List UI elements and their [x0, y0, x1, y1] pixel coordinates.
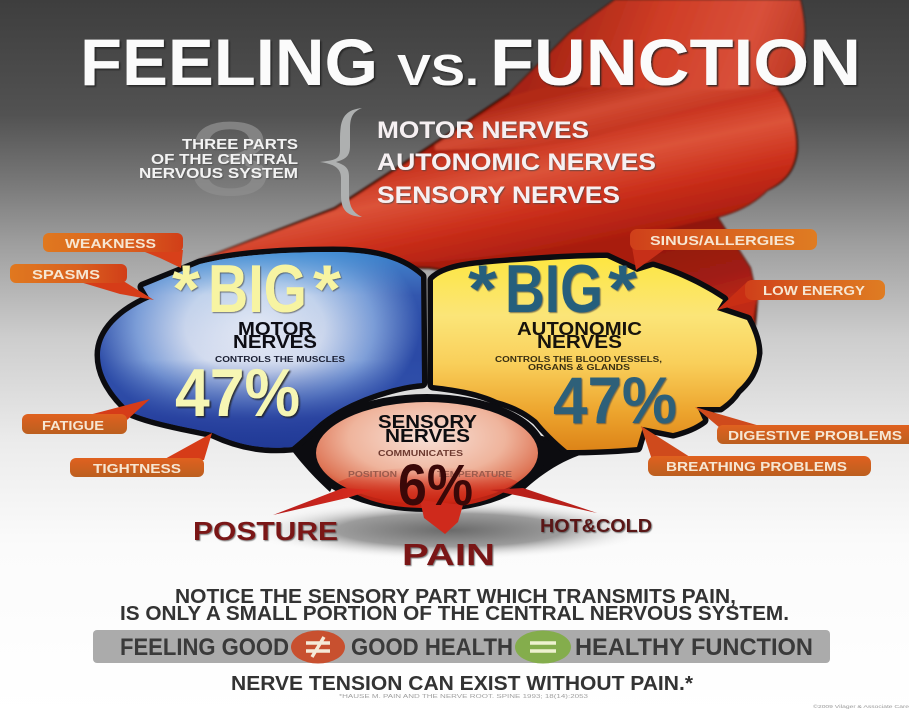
black flare: right: [515, 430, 600, 492]
callout: fatigue: [22, 399, 150, 434]
icon: not equal sign: [291, 630, 345, 664]
red glow at base of oval: [338, 467, 518, 508]
intro: three parts label: OF THE CENTRAL: [151, 151, 298, 168]
title: FUNCTION: [490, 25, 861, 99]
panel shape: blue lobe: [100, 252, 422, 448]
icon: faint numeral 3: 3: [188, 101, 273, 218]
callout: breathing problems: BREATHING PROBLEMS: [666, 459, 847, 474]
icon: curly brace: [320, 108, 362, 217]
callout: low energy: [717, 280, 885, 310]
panel shape: pink oval: [312, 398, 542, 508]
heading: [378, 412, 477, 446]
copyright: ©2009 Vilager & Associate Care: [813, 703, 909, 709]
position and temperature labels: TEMPERATURE: [437, 470, 513, 479]
heading: MOTOR: [238, 319, 313, 339]
list of three nerve types: AUTONOMIC NERVES: [377, 149, 656, 176]
heading: [233, 319, 317, 352]
icon: equals sign: [515, 630, 571, 664]
equation bar: GOOD HEALTH: [351, 634, 513, 661]
panel: sensory nerves: [273, 398, 597, 534]
text block: notice: NOTICE THE SENSORY PART WHICH TRANSMITS PAIN,: [175, 586, 736, 608]
label: posture: POSTURE: [193, 516, 338, 546]
callout: low energy: LOW ENERGY: [763, 283, 865, 298]
heading: NERVES: [537, 332, 622, 352]
description: ORGANS & GLANDS: [528, 363, 631, 372]
heading: NERVES: [385, 426, 470, 446]
equation bar: [93, 630, 830, 664]
equation bar: FEELING GOOD: [120, 634, 289, 661]
list of three nerve types: MOTOR NERVES: [377, 117, 589, 144]
black flare: left: [285, 425, 350, 492]
intro: three parts label: [139, 101, 298, 218]
intro: three parts label: NERVOUS SYSTEM: [139, 165, 298, 182]
callout: fatigue: FATIGUE: [42, 418, 104, 433]
big label: *: [608, 251, 638, 327]
list of three nerve types: SENSORY NERVES: [377, 182, 620, 209]
heading: NERVES: [233, 332, 317, 352]
heading: AUTONOMIC: [517, 319, 642, 339]
description: COMMUNICATES: [378, 449, 464, 458]
callout: weakness: WEAKNESS: [65, 236, 156, 251]
big label: *: [172, 251, 201, 327]
big label: BIG: [208, 251, 307, 327]
description: CONTROLS THE MUSCLES: [215, 355, 346, 364]
panel shape: yellow lobe: [433, 258, 757, 450]
illustration: red spine segments: [195, 0, 804, 325]
percentage: 47%: [175, 355, 300, 431]
title: FEELING: [80, 25, 378, 99]
chart shadow under sensory section: [245, 500, 655, 560]
callout: sinus and allergies: SINUS/ALLERGIES: [650, 233, 795, 248]
big label: *: [468, 251, 498, 327]
label: pain: PAIN: [402, 537, 495, 572]
text block: nerve tension: NERVE TENSION CAN EXIST WITHOUT PAIN.*: [231, 673, 693, 695]
description: [495, 355, 662, 372]
callout: spasms: SPASMS: [32, 267, 100, 282]
panel: autonomic nerves: [433, 251, 757, 450]
callout: sinus and allergies: [630, 229, 817, 270]
big label: *: [313, 251, 342, 327]
heading: SENSORY: [378, 412, 477, 432]
callout: tightness: [70, 433, 212, 477]
arrow: left to posture: [273, 488, 372, 515]
panel: motor nerves: [100, 251, 422, 448]
callout: tightness: TIGHTNESS: [93, 461, 181, 476]
callout: breathing problems: [641, 426, 871, 476]
description: CONTROLS THE BLOOD VESSELS,: [495, 355, 662, 364]
text block: notice: IS ONLY A SMALL PORTION OF THE CENTRAL NERVOUS SYSTEM.: [120, 603, 789, 625]
blue shading overlay: [100, 252, 422, 448]
intro: three parts label: THREE PARTS: [182, 136, 298, 153]
percentage: 6%: [398, 453, 473, 518]
position and temperature labels: POSITION: [348, 470, 397, 479]
text block: notice: [120, 586, 789, 625]
title: VS.: [397, 46, 479, 95]
big label: BIG: [505, 251, 603, 327]
arrow: down to pain: [420, 500, 463, 534]
label: hot and cold: HOT&COLD: [540, 516, 652, 536]
equation bar: HEALTHY FUNCTION: [575, 634, 813, 661]
heading: [517, 319, 642, 352]
arrow: right to hot and cold: [490, 488, 597, 513]
footnote: *HAUSE M. PAIN AND THE NERVE ROOT. SPINE 1993; 18(14):2053: [339, 694, 588, 700]
callout: digestive problems: [695, 407, 909, 444]
callout: spasms: [10, 264, 154, 300]
callout: weakness: [43, 233, 183, 268]
position and temperature labels: [348, 470, 513, 479]
percentage: 47%: [553, 363, 677, 437]
title: [80, 25, 861, 99]
list of three nerve types: [377, 117, 656, 209]
callout: digestive problems: DIGESTIVE PROBLEMS: [728, 428, 902, 443]
